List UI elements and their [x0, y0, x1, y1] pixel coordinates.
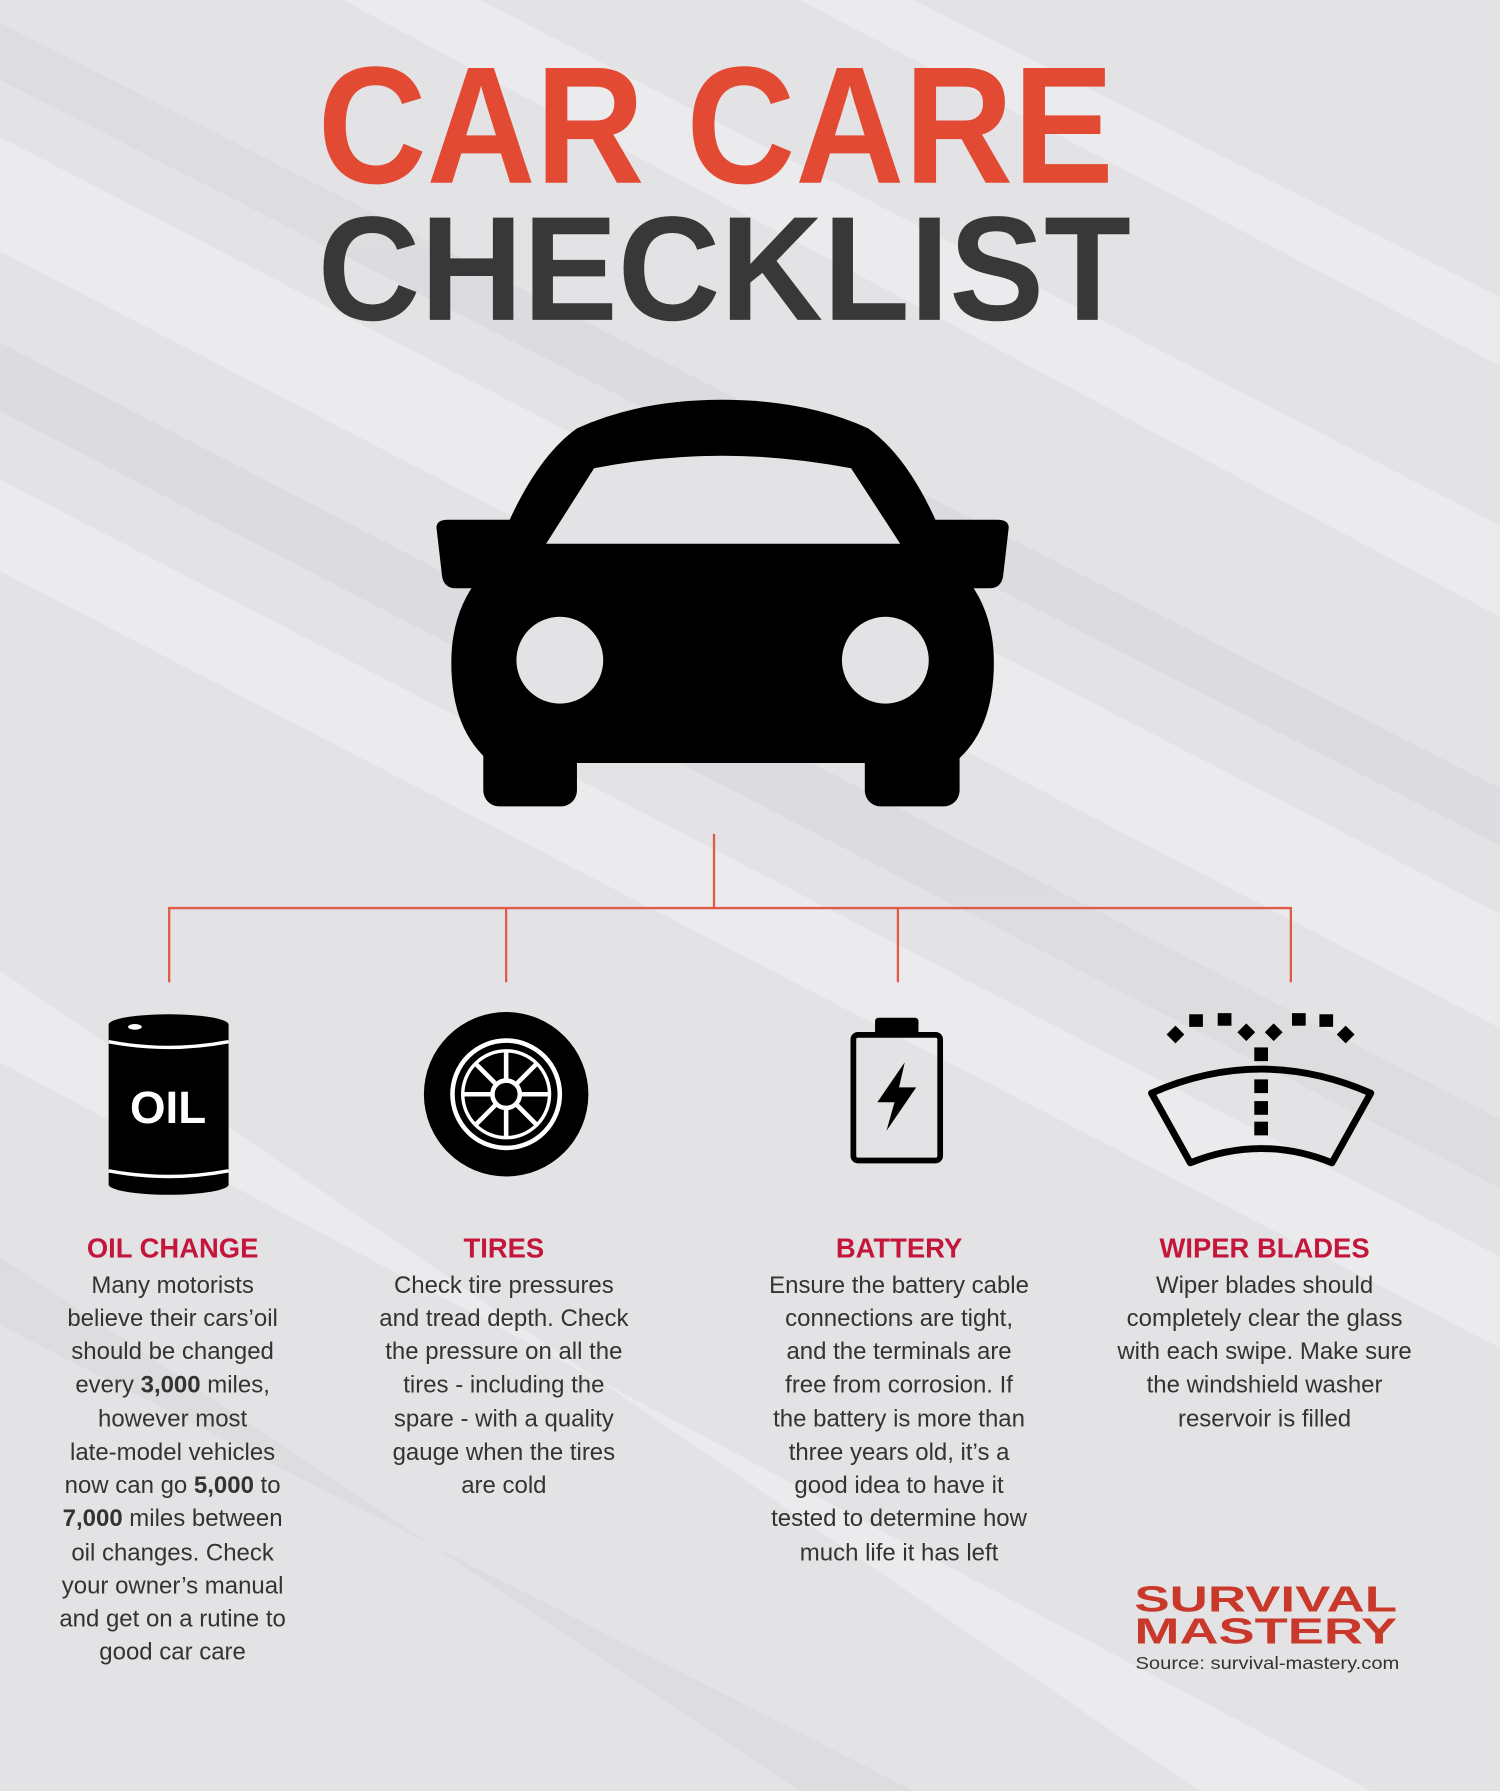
icon: oil can — [109, 1014, 229, 1195]
column: battery: BATTERY — [836, 1233, 962, 1264]
column: battery: and the terminals are — [786, 1338, 1012, 1365]
column: oil change: now can go 5,000 to — [65, 1472, 281, 1499]
column: oil change: good car care — [99, 1639, 246, 1666]
logo: survival mastery: SURVIVAL — [1134, 1579, 1397, 1620]
column: battery: free from corrosion. If — [785, 1371, 1013, 1398]
column: oil change — [59, 1233, 286, 1666]
column: battery: tested to determine how — [771, 1505, 1028, 1532]
column: tires: tires - including the — [403, 1371, 604, 1398]
icon: tire — [424, 1012, 588, 1176]
column: tires: and tread depth. Check — [379, 1305, 629, 1332]
column: wiper blades: Wiper blades should — [1156, 1272, 1373, 1299]
connector lines — [169, 834, 1291, 982]
column: battery: good idea to have it — [794, 1472, 1004, 1499]
column: oil change: believe their cars’oil — [67, 1305, 278, 1332]
column: tires: Check tire pressures — [394, 1272, 614, 1299]
logo: survival mastery: Source: survival-mastery.com — [1135, 1653, 1399, 1673]
logo: survival mastery: MASTERY — [1134, 1611, 1397, 1652]
icon: car — [436, 400, 1009, 806]
column: battery: the battery is more than — [773, 1406, 1025, 1433]
column: oil change: every 3,000 miles, — [75, 1371, 270, 1398]
column: wiper blades: completely clear the glass — [1127, 1305, 1402, 1332]
column: oil change: should be changed — [71, 1338, 274, 1365]
column: tires: spare - with a quality — [394, 1406, 614, 1433]
column: oil change: Many motorists — [91, 1272, 254, 1299]
column: wiper blades — [1116, 1233, 1412, 1433]
column: oil change: late-model vehicles — [70, 1439, 275, 1466]
title: CAR CARE — [318, 33, 1114, 219]
column: battery — [769, 1233, 1029, 1566]
column: battery: connections are tight, — [785, 1305, 1013, 1332]
column: oil change: your owner’s manual — [62, 1572, 283, 1599]
column: oil change: oil changes. Check — [71, 1539, 275, 1566]
logo: survival mastery — [1134, 1579, 1399, 1673]
column: battery: Ensure the battery cable — [769, 1272, 1029, 1299]
column: oil change: 7,000 miles between — [63, 1505, 283, 1532]
column: tires: are cold — [461, 1472, 546, 1499]
column: tires: the pressure on all the — [385, 1338, 622, 1365]
icon: wiper — [1151, 1013, 1371, 1163]
column: oil change: however most — [98, 1406, 248, 1433]
column: wiper blades: the windshield washer — [1147, 1371, 1382, 1398]
column: battery: much life it has left — [800, 1539, 999, 1566]
column: oil change: OIL CHANGE — [87, 1233, 258, 1264]
column: tires: TIRES — [463, 1233, 544, 1264]
column: oil change: and get on a rutine to — [59, 1606, 286, 1633]
column: wiper blades: reservoir is filled — [1178, 1406, 1351, 1433]
title: CHECKLIST — [318, 187, 1131, 352]
icon: battery — [853, 1018, 940, 1160]
column: wiper blades: with each swipe. Make sure — [1116, 1338, 1412, 1365]
column: tires: gauge when the tires — [393, 1439, 615, 1466]
column: wiper blades: WIPER BLADES — [1160, 1233, 1370, 1264]
column: battery: three years old, it’s a — [789, 1439, 1010, 1466]
icon: oil can: OIL — [130, 1082, 206, 1133]
title — [318, 33, 1131, 352]
column: tires — [379, 1233, 629, 1499]
